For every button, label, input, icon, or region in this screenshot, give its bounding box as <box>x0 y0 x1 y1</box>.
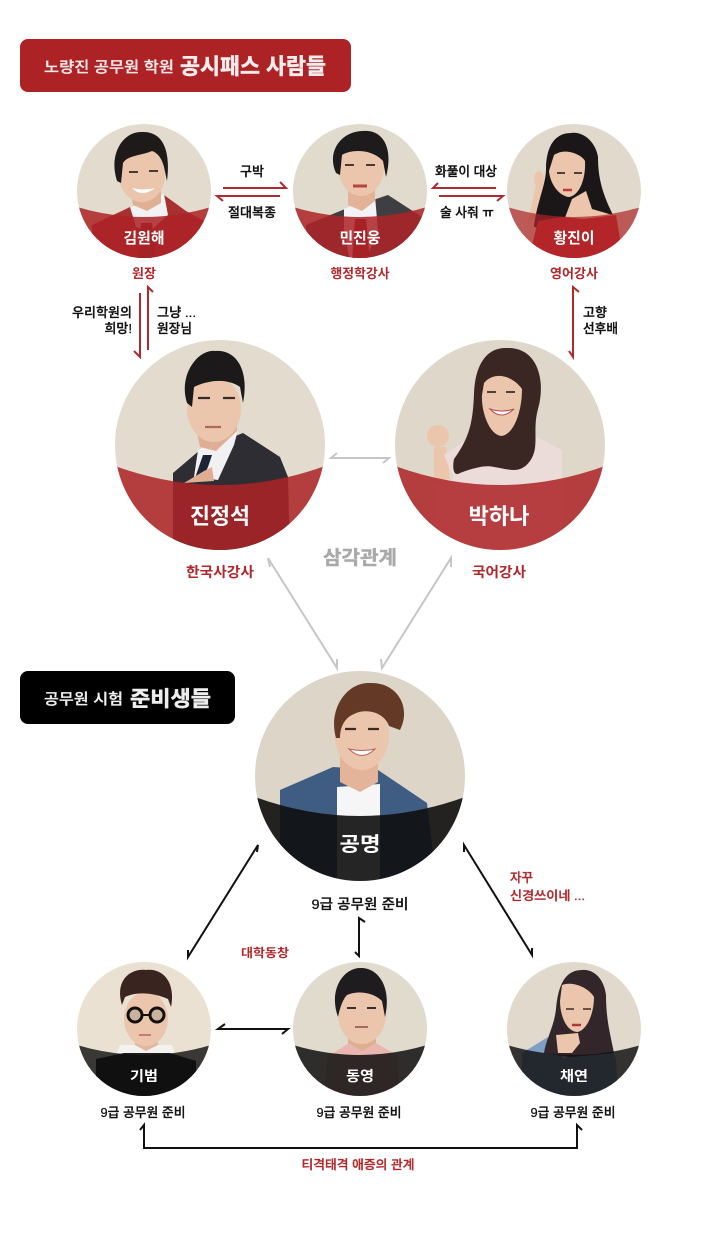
label: 고향 선후배 <box>583 305 618 336</box>
arrow: 진정석 and 박하나 <box>331 453 389 463</box>
label: 그냥 원장님: 원장님 <box>157 321 192 336</box>
portrait: 공명 <box>255 671 465 886</box>
portrait: 황진이 <box>507 124 641 261</box>
label: 구박: 구박 <box>240 164 264 179</box>
label: 티격태격 애증의 관계: 티격태격 애증의 관계 <box>302 1157 414 1172</box>
label: 고향 선후배: 선후배 <box>583 321 618 336</box>
label: 자꾸 신경쓰이네 <box>510 871 585 903</box>
heading: academy people: 노량진 공무원 학원 <box>44 59 174 76</box>
heading: exam candidates <box>20 671 235 724</box>
portrait: 김원해 <box>77 124 211 261</box>
role: 행정학강사: 행정학강사 <box>330 266 390 281</box>
role: 공명 exam preparation: 9급 공무원 준비 <box>312 896 408 912</box>
label: 술 사줘: 술 사줘 ㅠ <box>440 205 494 220</box>
label: 자꾸 신경쓰이네: 신경쓰이네 ... <box>510 889 585 903</box>
heading: exam candidates: 공무원 시험 <box>44 691 123 708</box>
heading: academy people <box>20 39 351 92</box>
arrow: 공명 and 기범 <box>188 845 258 957</box>
label: 우리학원의 희망: 우리학원의 <box>72 305 132 320</box>
portrait: 박하나 <box>395 340 605 555</box>
name: 황진이: 황진이 <box>554 230 594 247</box>
relationship chart <box>20 39 641 1170</box>
arrow: 공명 and 동영 <box>355 918 365 956</box>
name: 채연: 채연 <box>560 1068 588 1084</box>
role: 동영 exam preparation: 9급 공무원 준비 <box>316 1105 402 1120</box>
role: 영어강사: 영어강사 <box>550 266 598 281</box>
name: 동영: 동영 <box>346 1068 374 1084</box>
label: 절대복종: 절대복종 <box>228 205 276 220</box>
label: 우리학원의 희망 <box>72 305 132 336</box>
label: 그냥 원장님 <box>157 305 196 336</box>
label: 우리학원의 희망: 희망! <box>104 321 132 336</box>
arrow: 진정석 and 공명 <box>268 558 337 668</box>
role: 한국사강사: 한국사강사 <box>186 564 254 580</box>
name: 박하나: 박하나 <box>468 504 530 529</box>
heading: academy people: 공시패스 사람들 <box>180 54 326 79</box>
heading: exam candidates: 준비생들 <box>130 688 211 711</box>
arrow: 황진이 and 박하나 <box>569 287 579 357</box>
portrait: 채연 <box>507 962 641 1099</box>
label: 고향 선후배: 고향 <box>583 305 607 320</box>
role: 기범 exam preparation: 9급 공무원 준비 <box>100 1105 186 1120</box>
arrow: 기범 and 채연 <box>140 1125 582 1148</box>
role: 원장: 원장 <box>132 266 156 281</box>
name: 진정석: 진정석 <box>190 504 250 529</box>
name: 기범: 기범 <box>130 1068 158 1084</box>
arrows: 김원해 and 민진웅 <box>217 182 286 201</box>
name: 공명: 공명 <box>340 833 380 856</box>
arrows: 민진웅 and 황진이 <box>433 183 503 201</box>
portrait: 민진웅 <box>293 124 427 261</box>
label: 그냥 원장님: 그냥 ... <box>157 305 196 320</box>
arrow: 기범 and 동영 <box>218 1024 288 1034</box>
arrow: 공명 and 채연 <box>464 845 532 955</box>
label: 대학동창: 대학동창 <box>241 945 289 960</box>
role: 국어강사: 국어강사 <box>472 564 526 580</box>
label: 삼각관계: 삼각관계 <box>323 547 397 569</box>
role: 채연 exam preparation: 9급 공무원 준비 <box>530 1105 616 1120</box>
portrait: 기범 <box>77 962 211 1099</box>
name: 김원해: 김원해 <box>124 230 164 247</box>
arrow: 박하나 and 공명 <box>381 558 451 668</box>
label: 화풀이 대상: 화풀이 대상 <box>435 164 497 179</box>
portrait: 진정석 <box>115 340 325 555</box>
name: 민진웅: 민진웅 <box>340 230 381 247</box>
portrait: 동영 <box>293 962 427 1099</box>
arrows: 김원해 and 진정석 <box>134 287 153 357</box>
label: 자꾸 신경쓰이네: 자꾸 <box>510 871 533 885</box>
